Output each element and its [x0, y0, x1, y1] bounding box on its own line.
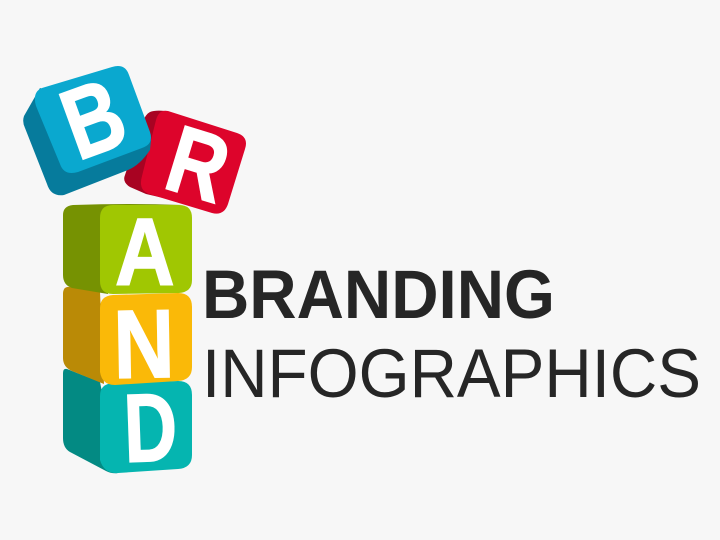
cube: letter B: B: [47, 57, 140, 182]
cube: letter B: [23, 57, 151, 195]
cube: letter N: [63, 287, 192, 399]
cube: letter D: [63, 369, 192, 483]
subtitle: INFOGRAPHICS: INFOGRAPHICS: [202, 335, 701, 412]
cube: letter D: D: [122, 373, 179, 483]
title: BRANDING: BRANDING: [202, 256, 555, 333]
cube: letter N: N: [112, 291, 175, 399]
cube: letter A: A: [115, 198, 175, 305]
cube: letter A: [63, 198, 192, 305]
cube: letter R: R: [155, 105, 241, 224]
